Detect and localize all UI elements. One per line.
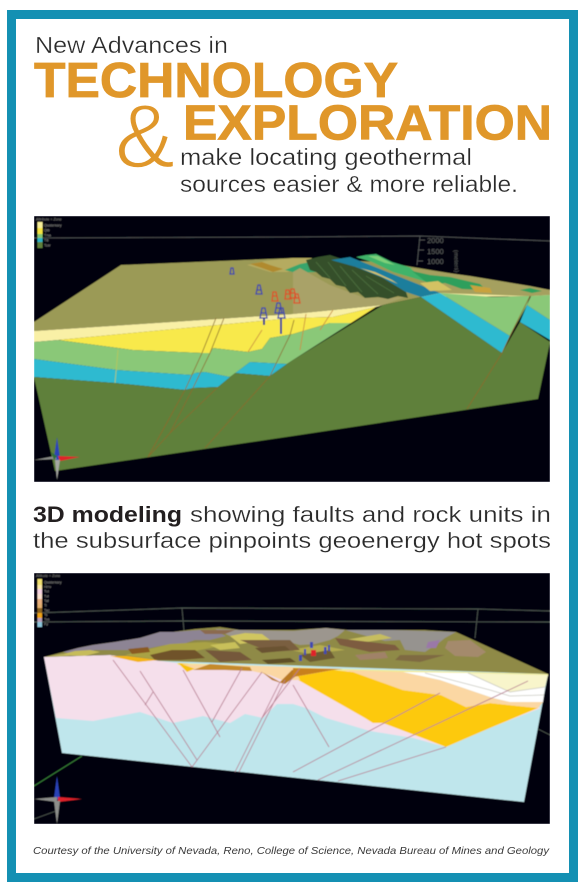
legend: Attribute = Zone [36,218,62,222]
headline: technology: TECHNOLOGY [34,54,398,108]
legend: Tma [44,234,51,238]
scale labels: 1500 [427,247,444,256]
legend [36,218,62,248]
terrain: tan outcrop [247,258,312,272]
well stems [263,318,265,325]
3D model image 2: pink and blue block [34,573,550,824]
headline: exploration: EXPLORATION [183,96,552,150]
legend: Tcar [44,244,51,248]
surface [34,258,550,331]
peach upper-middle band [182,664,300,680]
pink layer [44,655,541,747]
legend: Quaternary [44,580,62,584]
legend: Tac [44,608,50,612]
surface [44,627,548,674]
legend: Tut [44,590,49,594]
cream layer [468,673,548,692]
caption line 1: 3D modeling [33,502,182,527]
caption line 2: the subsurface pinpoints geoenergy hot spots [33,528,551,553]
compass [34,776,82,824]
red marker [311,650,316,656]
well markers: red [272,289,300,303]
orange layer [293,670,538,747]
right cyan layers [421,293,510,353]
caption between images: showing faults and rock units in [190,502,551,527]
compass [34,437,80,480]
scale labels: 2000 [427,236,444,245]
legend: Tos [44,618,50,622]
light blue base [44,657,548,802]
headline: ampersand: & [115,87,175,187]
terrain: dark green ridges [316,262,394,294]
grid lines [34,608,550,819]
terrain: tan basin [445,640,486,657]
fault lines [113,660,528,781]
legend [36,574,62,627]
grid lines and scale [34,236,550,265]
legend: Hmv [44,585,51,589]
white layer [403,672,545,702]
basement layer [34,297,550,471]
left orange slivers [110,656,158,662]
terrain: bright green ridge [356,254,443,287]
cream layer [34,305,383,342]
peach layer [343,670,543,708]
legend: Qtb [44,228,50,232]
scale labels: (meters) [452,250,459,272]
legend: Tvt [44,594,49,598]
legend: Pz [44,622,48,626]
thin lines in white layer [425,673,545,696]
terrain: blue zone [331,257,440,297]
right light green layers [440,293,530,336]
title block [34,32,552,197]
scale labels [427,236,459,272]
subtitle line 1: make locating geothermal [180,144,472,170]
terrain: dark green zone [306,255,408,299]
legend: Quaternary [44,224,62,228]
light green layer [34,323,351,377]
wells [299,642,330,661]
yellow layer [58,307,376,353]
scale labels: 1000 [427,257,444,266]
terrain: right-hand mix [410,268,550,296]
terrain: purple-grey band [63,630,226,655]
legend: Tlb [44,238,49,242]
axis line [34,756,82,786]
legend: Ti [44,604,47,608]
well markers: blue [230,268,285,318]
terrain: brown patches [128,647,150,654]
brown wedges [193,664,252,671]
caption between images [33,502,551,553]
fault lines [115,296,530,457]
terrain: yellow patches [60,650,100,656]
intro line: New Advances in [35,32,228,58]
top stripe [177,663,548,676]
image credit: Courtesy of the University of Nevada, Reno, College of Science, Nevada Bureau of Mines and Geology [33,845,550,857]
3D model image 1: green and yellow block [34,216,550,482]
legend: Ts [44,613,48,617]
legend: Tat [44,599,49,603]
legend: Altitude = Zone [36,574,60,578]
cyan layer [34,359,287,390]
subtitle line 2: sources easier & more reliable. [180,171,518,197]
